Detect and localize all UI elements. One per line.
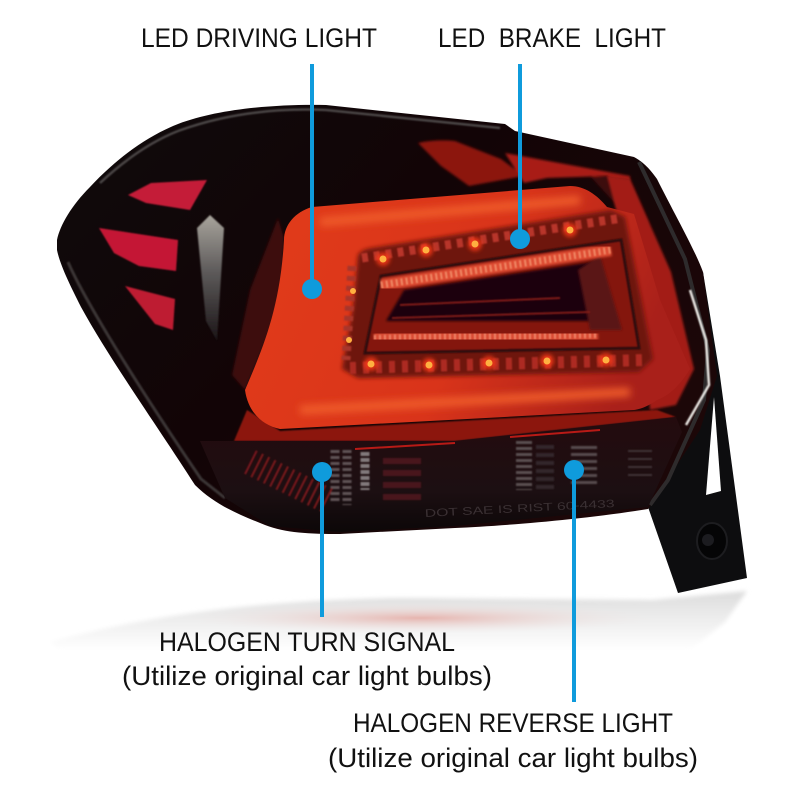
bulb textures — [250, 441, 640, 505]
label: halogen reverse light: (Utilize original car light bulbs) — [328, 743, 698, 773]
label: halogen turn signal: HALOGEN TURN SIGNAL — [159, 627, 455, 657]
LED dots — [364, 223, 613, 372]
reflection under the lamp — [50, 591, 747, 650]
label: LED brake light: LED BRAKE LIGHT — [438, 23, 666, 53]
lamp body — [57, 105, 717, 534]
crystal LED strips — [346, 218, 645, 368]
tail lamp — [57, 105, 747, 593]
callout: LED driving light — [302, 64, 322, 299]
callout: LED brake light — [510, 64, 530, 249]
mounting bracket — [648, 272, 747, 593]
label: halogen turn signal — [122, 627, 492, 691]
label: LED driving light: LED DRIVING LIGHT — [141, 23, 377, 53]
LED driving light panel — [245, 186, 690, 429]
label: halogen turn signal: (Utilize original car light bulbs) — [122, 661, 492, 691]
moulded lens marking: DOT SAE IS RIST 60-4433 — [425, 498, 615, 520]
smoked lower lens — [200, 417, 682, 532]
brake light housing — [342, 210, 653, 378]
callout: halogen reverse light — [564, 460, 584, 702]
label: halogen reverse light — [328, 708, 698, 773]
label: halogen reverse light: HALOGEN REVERSE LIGHT — [353, 708, 673, 738]
rim highlights — [68, 110, 709, 505]
callout: halogen turn signal — [312, 462, 332, 617]
red chevron lights — [99, 180, 207, 330]
dark red side reflection — [232, 218, 284, 390]
side reflector — [197, 215, 224, 341]
upper red reflections — [418, 140, 650, 225]
right outer red zone — [607, 176, 694, 410]
callout lines — [302, 64, 584, 702]
LED bars — [381, 250, 611, 285]
band below red panel — [234, 410, 676, 441]
